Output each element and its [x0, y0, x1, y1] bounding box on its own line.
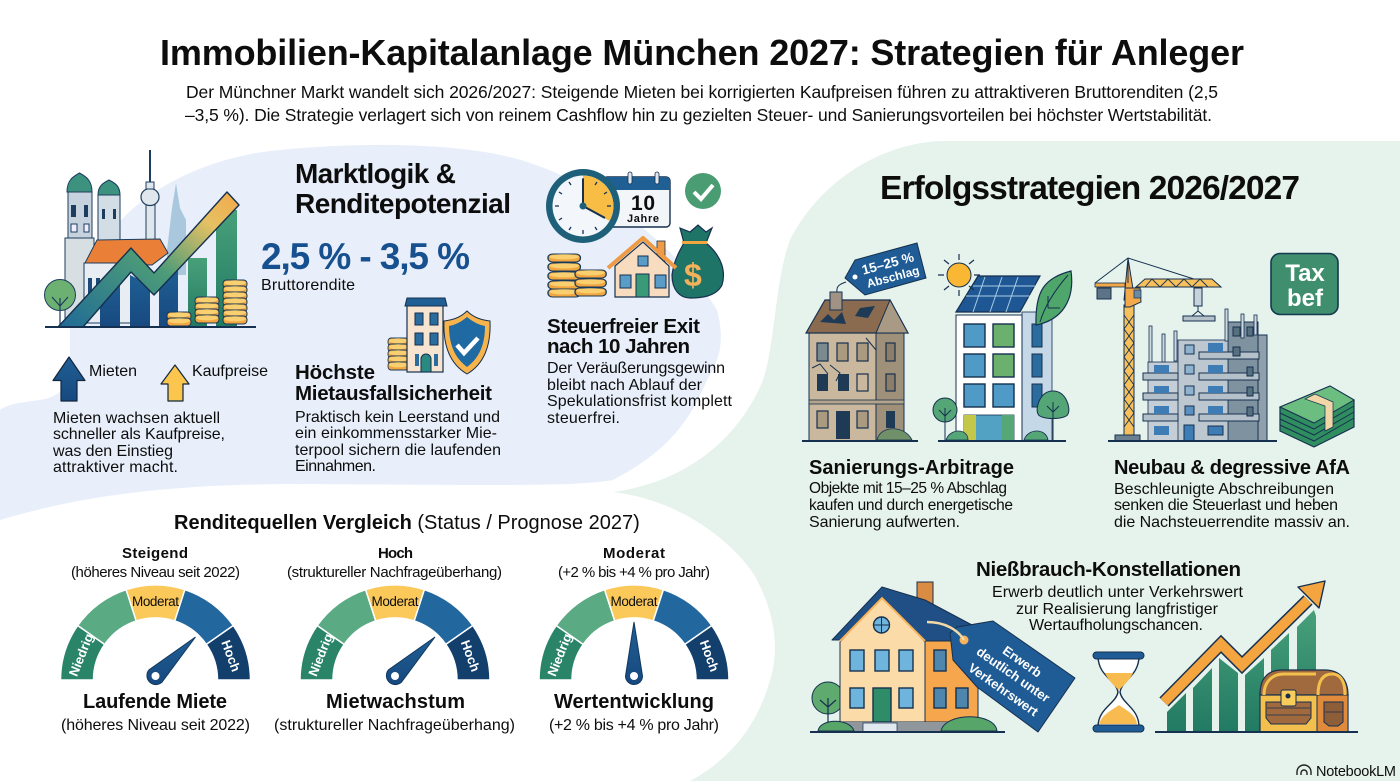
- tax badge: Tax: [1285, 260, 1325, 287]
- price tag: [927, 621, 1075, 732]
- heading: Mietausfallsicherheit: Höchste: [295, 361, 375, 384]
- price tag: 15–25 %: [860, 249, 916, 278]
- gauge 1: Laufende Miete: [60, 545, 250, 734]
- text: Nießbrauch: Wertaufholungschancen.: [1029, 617, 1203, 634]
- intro text: [185, 82, 1218, 125]
- gauge 1: Laufende Miete: (höheres Niveau seit 2022): [71, 564, 240, 581]
- heading: Neubau: Neubau & degressive AfA: [1114, 457, 1350, 479]
- icon: building, coins and shield: [388, 298, 490, 374]
- text: Mietausfallsicherheit: ein einkommensstarker Mie-: [295, 425, 497, 442]
- text: Sanierungs-Arbitrage: kaufen und durch energetische: [809, 497, 1013, 514]
- money stack: [1280, 386, 1354, 447]
- calendar: Jahre: [627, 213, 659, 225]
- house: [608, 238, 676, 297]
- illustration: Munich skyline with rising chart: [44, 150, 256, 328]
- text: Steuerfreier Exit: steuerfrei.: [547, 410, 620, 427]
- money bag: [672, 225, 723, 298]
- calendar: 10: [631, 192, 655, 215]
- gauge 2: Mietwachstum: Mietwachstum: [326, 691, 465, 713]
- icon: arrow Mieten: [53, 357, 85, 401]
- heading: Steuerfreier Exit: [547, 315, 700, 358]
- treasure chest: [1260, 670, 1348, 732]
- heading: Sanierungs-Arbitrage: Sanierungs-Arbitrage: [809, 457, 1014, 479]
- clock: [546, 169, 620, 243]
- price tag: Verkehrswert: [966, 660, 1042, 720]
- text: Mietausfallsicherheit: [295, 409, 501, 475]
- price tag: deutlich unter: [974, 644, 1053, 705]
- intro text: Der Münchner Markt wandelt sich 2026/2027: Steigende Mieten bei korrigierten Kaufpreisen führen zu attraktiveren Bruttorenditen (2,5: [186, 82, 1218, 102]
- gauge 3: Wertentwicklung: Moderat: [603, 545, 665, 562]
- text: market explanation: schneller als Kaufpreise,: [53, 426, 225, 443]
- gauge 3: Wertentwicklung: (+2 % bis +4 % pro Jahr): [549, 717, 719, 734]
- gauge dial: Niedrig: [544, 631, 575, 678]
- illustration: renovated green building: [933, 254, 1072, 442]
- text: Nießbrauch: [992, 584, 1244, 634]
- calendar: [603, 172, 670, 227]
- text: market explanation: attraktiver macht.: [53, 459, 178, 476]
- gauge 2: Mietwachstum: (struktureller Nachfrageüberhang): [287, 564, 502, 581]
- text: market explanation: [52, 410, 225, 476]
- heading: Erfolgsstrategien: Erfolgsstrategien 2026/2027: [880, 170, 1300, 207]
- gauge 3: Wertentwicklung: Wertentwicklung: [554, 691, 714, 713]
- heading: Mietausfallsicherheit: Mietausfallsicherheit: [295, 382, 492, 405]
- price tag: Abschlag: [865, 263, 921, 291]
- logo: NotebookLM: NotebookLM: [1316, 764, 1396, 780]
- heading: Mietausfallsicherheit: [295, 361, 492, 405]
- text: Nießbrauch: Erwerb deutlich unter Verkehrswert: [992, 584, 1244, 601]
- text: Mietausfallsicherheit: terpool sichern die laufenden: [295, 442, 501, 459]
- text: Sanierungs-Arbitrage: Objekte mit 15–25 % Abschlag: [809, 480, 1007, 497]
- gauge 1: Laufende Miete: (höheres Niveau seit 2022): [61, 717, 250, 734]
- gauge 1: Laufende Miete: Steigend: [122, 545, 188, 562]
- illustration: old house with discount tag: [802, 243, 926, 442]
- text: Steuerfreier Exit: Spekulationsfrist komplett: [547, 393, 733, 410]
- gauge dial: Moderat: [610, 594, 658, 609]
- gauge 3: Wertentwicklung: [539, 545, 729, 734]
- check badge: [685, 173, 721, 209]
- heading: Marktlogik: [295, 158, 511, 219]
- gauge 2: Mietwachstum: [274, 545, 515, 734]
- illustration: rising chart with treasure chest: [1155, 581, 1358, 733]
- text: Neubau: Beschleunigte Abschreibungen: [1114, 481, 1334, 498]
- price tag: Erwerb: [1000, 643, 1045, 680]
- text: Sanierungs-Arbitrage: Sanierung aufwerten.: [809, 514, 960, 531]
- gauge dial: Niedrig: [66, 631, 96, 678]
- label: Kaufpreise: Kaufpreise: [192, 363, 268, 380]
- illustration: family house with price tag: [810, 582, 1075, 733]
- illustration: clock, calendar, house, money: [546, 169, 723, 298]
- text: Mietausfallsicherheit: Einnahmen.: [295, 458, 376, 475]
- money bag: $: [684, 257, 702, 293]
- icon: arrow Kaufpreise: [161, 365, 189, 401]
- gauge 2: Mietwachstum: (struktureller Nachfrageüberhang): [274, 717, 515, 734]
- text: Nießbrauch: zur Realisierung langfristiger: [1016, 601, 1219, 618]
- gauge dial: Niedrig: [305, 631, 336, 678]
- gauge dial: Moderat: [132, 594, 179, 609]
- gauge dial: Hoch: [218, 638, 244, 674]
- gauge dial: [60, 585, 250, 685]
- text: market explanation: Mieten wachsen aktuell: [53, 410, 220, 427]
- title: Immobilien-Kapitalanlage München 2027: Strategien für Anleger: [160, 32, 1244, 73]
- background: blue panel: [0, 145, 721, 520]
- heading: Marktlogik: Renditepotenzial: [295, 188, 511, 219]
- tax badge: [1271, 254, 1338, 314]
- gauge dial: Hoch: [458, 638, 483, 674]
- gauge dial: [300, 585, 490, 685]
- gauge 2: Mietwachstum: Hoch: [378, 545, 413, 562]
- gauge dial: Hoch: [697, 638, 722, 674]
- gauge 1: Laufende Miete: Laufende Miete: [83, 691, 227, 713]
- label: Mieten: Mieten: [89, 363, 137, 380]
- text: Neubau: senken die Steuerlast und heben: [1114, 497, 1338, 514]
- building under construction: [1143, 309, 1267, 441]
- stat: yield range: 2,5 % - 3,5 %: [261, 236, 470, 277]
- heading: comparison: Renditequellen Vergleich (Status / Prognose 2027): [174, 512, 640, 534]
- gauge dial: [539, 585, 729, 684]
- tax badge: bef: [1287, 285, 1324, 312]
- heading: Nießbrauch: Nießbrauch-Konstellationen: [976, 558, 1241, 581]
- text: market explanation: was den Einstieg: [52, 443, 173, 460]
- text: Steuerfreier Exit: [547, 360, 733, 427]
- text: Steuerfreier Exit: bleibt nach Ablauf der: [547, 377, 703, 394]
- gauge 3: Wertentwicklung: (+2 % bis +4 % pro Jahr): [558, 564, 710, 581]
- crane: [1095, 258, 1221, 441]
- text: Neubau: die Nachsteuerrendite massiv an.: [1114, 514, 1350, 531]
- icon: hourglass: [1093, 652, 1144, 732]
- text: Neubau: [1114, 481, 1350, 531]
- stat: yield range: Bruttorendite: [261, 277, 355, 294]
- intro text: –3,5 %). Die Strategie verlagert sich von reinem Cashflow hin zu gezielten Steuer- und Sanierungsvorteilen bei höchster Wertstabilität.: [185, 105, 1212, 125]
- price tag: [845, 243, 926, 295]
- background: green panel: [613, 141, 1400, 781]
- heading: Steuerfreier Exit: Steuerfreier Exit: [547, 315, 700, 338]
- coins: [548, 254, 606, 297]
- text: Sanierungs-Arbitrage: [809, 480, 1013, 531]
- illustration: crane and new building: [1095, 254, 1354, 447]
- text: Steuerfreier Exit: Der Veräußerungsgewinn: [547, 360, 725, 377]
- text: Mietausfallsicherheit: Praktisch kein Leerstand und: [295, 409, 500, 426]
- heading: Marktlogik: Marktlogik &: [295, 158, 456, 189]
- gauge dial: Moderat: [372, 594, 419, 609]
- heading: Steuerfreier Exit: nach 10 Jahren: [547, 335, 690, 358]
